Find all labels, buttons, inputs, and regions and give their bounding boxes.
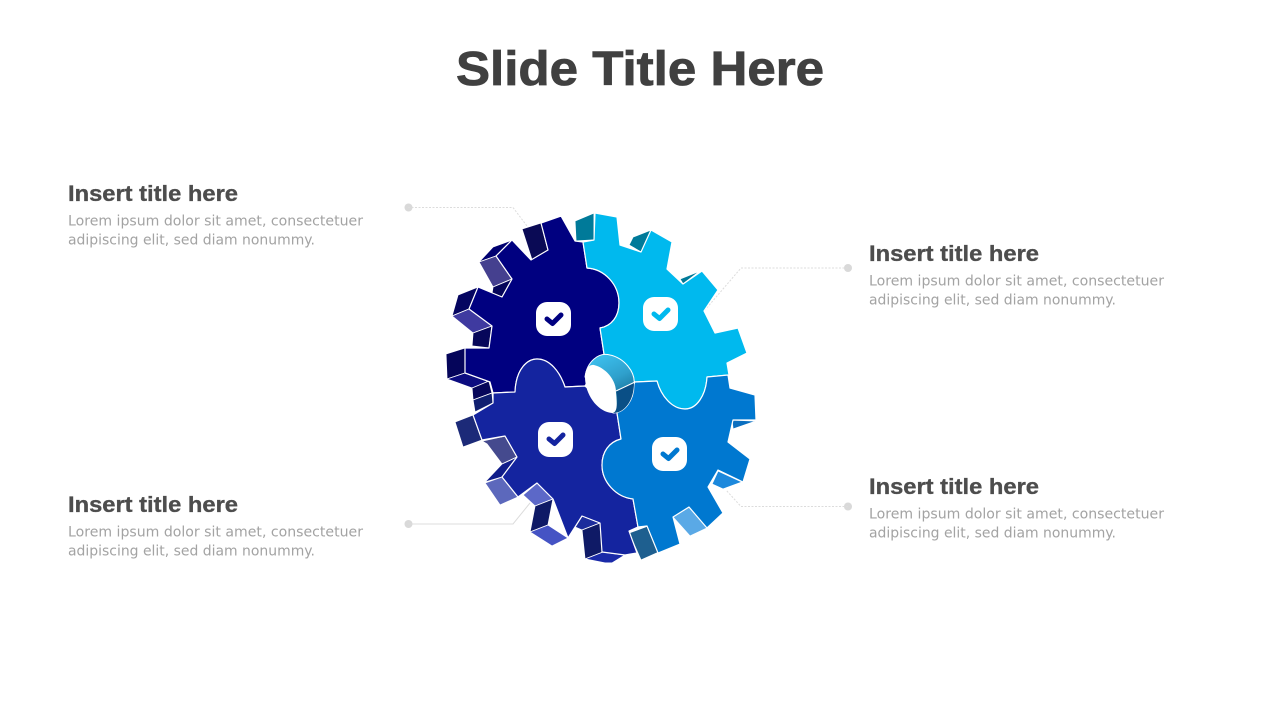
connector: bottom left: [404, 503, 530, 528]
gear segment: indigo: [473, 359, 638, 555]
gear segment: navy: [465, 216, 619, 393]
text block: bottom left: Insert title here: [68, 492, 238, 517]
connector: top right: [705, 264, 852, 310]
icon: check light blue: [643, 297, 678, 331]
title: Slide Title Here: [456, 43, 824, 96]
gear teeth sides: blue segment: [629, 420, 756, 560]
gear teeth sides: navy segment: [446, 223, 548, 412]
text block: bottom right: Lorem ipsum dolor sit amet, consectetuer: [869, 506, 1164, 522]
text block: bottom right: [869, 474, 1164, 542]
text block: top left: adipiscing elit, sed diam nonummy.: [68, 232, 315, 248]
text block: top left: [68, 181, 363, 248]
text block: top right: [869, 241, 1164, 308]
text block: bottom right: adipiscing elit, sed diam nonummy.: [869, 526, 1116, 542]
text block: top left: Insert title here: [68, 181, 238, 206]
connector: bottom right: [726, 490, 852, 510]
gear segment: blue: [602, 375, 756, 553]
text block: bottom right: Insert title here: [869, 474, 1039, 499]
text block: top right: Lorem ipsum dolor sit amet, consectetuer: [869, 274, 1164, 290]
text block: top right: adipiscing elit, sed diam nonummy.: [869, 292, 1116, 308]
text block: top left: Lorem ipsum dolor sit amet, consectetuer: [68, 214, 363, 230]
chart: 3D gear: [446, 213, 756, 563]
connector: top left: [404, 204, 527, 226]
text block: bottom left: Lorem ipsum dolor sit amet, consectetuer: [68, 524, 363, 540]
gear teeth sides: light blue segment: [575, 213, 700, 284]
gear segment: light blue: [583, 213, 747, 409]
text block: bottom left: adipiscing elit, sed diam nonummy.: [68, 544, 315, 560]
icon: check indigo: [538, 422, 573, 457]
icon: check blue: [652, 437, 687, 471]
center hole: [585, 354, 635, 413]
icon: check navy: [536, 302, 571, 336]
text block: bottom left: [68, 492, 363, 560]
text block: top right: Insert title here: [869, 241, 1039, 266]
gear teeth sides: indigo segment: [455, 415, 625, 563]
